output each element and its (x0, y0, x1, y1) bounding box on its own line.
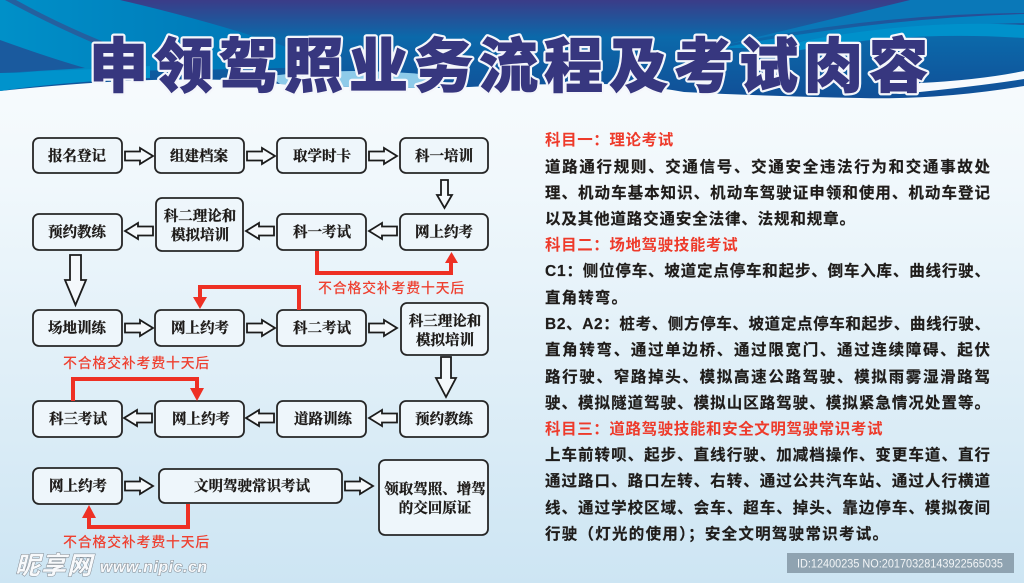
arrow: down to online booking (437, 180, 452, 208)
watermark: 昵享网 (15, 552, 96, 580)
flow row 1: 报名登记 (48, 147, 106, 165)
flow row 3: 科二考试 (293, 319, 351, 337)
red retry arrow 1 (317, 251, 458, 273)
flow row 3: 模拟培训 (416, 331, 474, 349)
red retry arrow 2 (193, 287, 299, 310)
flow row 4: 网上约考 (172, 410, 230, 428)
header banner with blue waves (0, 0, 1024, 98)
flow row 3: 场地训练 (48, 319, 107, 337)
subject three body: 通过路口、路口左转、右转、通过公共汽车站、通过人行横道 (545, 471, 990, 490)
subject three body: 上车前转呗、起步、直线行驶、加减档操作、变更车道、直行 (545, 445, 990, 464)
subject two heading: 科目二：场地驾驶技能考试 (545, 235, 738, 254)
subject three heading: 科目三：道路驾驶技能和安全文明驾驶常识考试 (545, 419, 883, 438)
subject one body (545, 157, 990, 228)
flow row 4: 道路训练 (294, 410, 353, 428)
flow row 5: 领取驾照、增驾 (384, 480, 486, 498)
subject two body: 驶、模拟隧道驾驶、模拟山区路驾驶、模拟紧急情况处置等。 (545, 393, 990, 412)
image id stamp (787, 553, 1014, 573)
flow row 2: 模拟培训 (171, 226, 229, 244)
flow row 4 (33, 401, 488, 437)
flow row 5: 的交回原证 (399, 499, 472, 517)
retry note 1: 不合格交补考费十天后 (318, 280, 465, 296)
flow row 4: 预约教练 (415, 410, 474, 428)
flow row 2: 科二理论和 (164, 208, 236, 225)
flow row 2: 预约教练 (48, 223, 107, 241)
flow row 1: 科一培训 (415, 147, 473, 165)
subject two body: 路行驶、窄路掉头、模拟高速公路驾驶、模拟雨雾湿滑路驾 (545, 367, 990, 386)
subject two body: B2、A2：桩考、侧方停车、坡道定点停车和起步、曲线行驶、 (545, 314, 990, 333)
arrow: down to field training (65, 255, 86, 305)
subject three body: 线、通过学校区域、会车、超车、掉头、靠边停车、模拟夜间 (545, 498, 990, 517)
subject one body: 理、机动车基本知识、机动车驾驶证申领和使用、机动车登记 (545, 183, 990, 202)
title: 申领驾照业务流程及考试肉容 (89, 34, 934, 100)
subject two body: 直角转弯。 (545, 288, 627, 307)
flow row 2 (33, 198, 488, 251)
flow row 4: 科三考试 (49, 410, 107, 428)
flow row 5: 文明驾驶常识考试 (194, 477, 310, 495)
flow row 3 (33, 303, 488, 355)
retry note 2: 不合格交补考费十天后 (63, 355, 210, 371)
flow row 3: 网上约考 (171, 319, 229, 337)
watermark (15, 552, 208, 580)
flow row 1 (33, 138, 488, 173)
flow row 5: 网上约考 (49, 477, 107, 495)
red retry arrow 4 (82, 504, 188, 527)
exam content panel (545, 130, 990, 543)
flowchart (33, 138, 488, 550)
subject three body (545, 445, 990, 543)
image id stamp: ID:12400235 NO:20170328143922565035 (797, 556, 1003, 570)
red retry arrow 3 (73, 379, 204, 401)
flow row 1: 组建档案 (170, 147, 228, 165)
arrow: down to booking coach (436, 357, 456, 397)
retry note 3: 不合格交补考费十天后 (63, 534, 210, 550)
title: 申领驾照业务流程及考试肉容 (89, 34, 934, 100)
subject one heading: 科目一：理论考试 (545, 130, 674, 149)
flow row 3: 科三理论和 (409, 313, 481, 330)
subject two body: C1：侧位停车、坡道定点停车和起步、倒车入库、曲线行驶、 (545, 261, 990, 280)
subject two body: 直角转弯、通过单边桥、通过限宽门、通过连续障碍、起伏 (545, 340, 990, 359)
subject one body: 以及其他道路交通安全法律、法规和规章。 (545, 209, 855, 228)
flow row 5 (33, 460, 488, 535)
flow row 1: 取学时卡 (293, 147, 351, 165)
flow row 2: 科一考试 (293, 223, 351, 241)
watermark: www.nipic.cn (100, 559, 208, 576)
subject three body: 行驶（灯光的使用）；安全文明驾驶常识考试。 (545, 524, 888, 543)
subject two body (545, 261, 990, 412)
subject one body: 道路通行规则、交通信号、交通安全违法行为和交通事故处 (545, 157, 990, 176)
flow row 2: 网上约考 (415, 223, 473, 241)
